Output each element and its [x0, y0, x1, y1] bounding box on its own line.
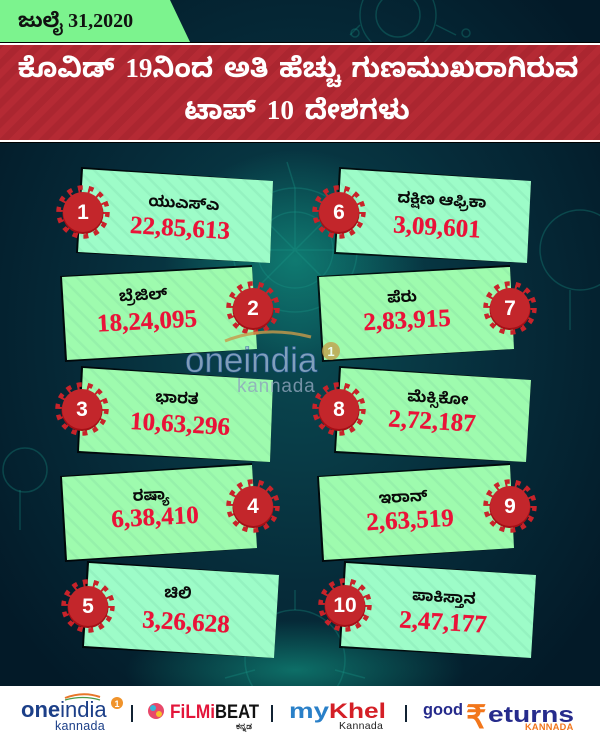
card 2: Brazil: 2: [247, 297, 259, 320]
card 1: USA: [58, 167, 273, 263]
card 2: Brazil: 18,24,095: [96, 305, 198, 338]
logo: goodreturns kannada: eturns: [488, 702, 574, 727]
watermark logo: 1: [327, 344, 335, 359]
watermark logo: oneindia: [185, 341, 318, 380]
card 3: India: ಭಾರತ: [155, 389, 199, 408]
card 10: Pakistan: ಪಾಕಿಸ್ತಾನ: [412, 587, 476, 610]
logo: goodreturns kannada: ₹: [466, 699, 486, 735]
logo: mykhel kannada: Kannada: [339, 720, 383, 732]
card 6: South Africa: 6: [333, 201, 345, 224]
logo: filmibeat kannada: [148, 702, 259, 733]
card 8: Mexico: 2,72,187: [387, 405, 476, 438]
card 8: Mexico: ಮೆಕ್ಸಿಕೋ: [407, 388, 469, 411]
watermark logo: kannada: [237, 376, 316, 397]
title text: ಟಾಪ್ 10 ದೇಶಗಳು: [184, 95, 410, 125]
card 8: Mexico: 8: [333, 398, 345, 421]
card 4: Russia: 4: [247, 495, 259, 518]
card 5: Chile: 3,26,628: [141, 606, 230, 639]
card 6: South Africa: 3,09,601: [392, 211, 481, 244]
card 5: Chile: 5: [82, 595, 94, 618]
card 6: South Africa: [314, 167, 531, 263]
logo: oneindia kannada: 1: [114, 699, 120, 709]
footer: [0, 686, 600, 739]
card 7: Peru: 2,83,915: [363, 305, 451, 336]
card 9: Iran: [317, 463, 534, 562]
card 3: India: 3: [76, 398, 88, 421]
card 7: Peru: 7: [504, 297, 516, 320]
card 10: Pakistan: [320, 561, 536, 658]
card 4: Russia: ರಷ್ಯಾ: [132, 486, 171, 508]
logo: filmibeat kannada: BEAT: [215, 702, 259, 723]
logo: filmibeat kannada: FiLMi: [170, 702, 215, 723]
logo: goodreturns kannada: good: [423, 700, 463, 719]
card 3: India: [58, 366, 273, 462]
logo: goodreturns kannada: [423, 699, 574, 735]
card 2: Brazil: [60, 265, 278, 362]
logo: oneindia kannada: [21, 694, 123, 733]
logo: mykhel kannada: Khel: [329, 700, 386, 723]
card 10: Pakistan: 10: [333, 594, 357, 617]
card 9: Iran: 2,63,519: [366, 505, 454, 536]
card 7: Peru: ಪೆರು: [387, 288, 418, 307]
card 1: USA: 22,85,613: [129, 212, 231, 245]
card 2: Brazil: ಬ್ರೆಜಿಲ್: [119, 286, 169, 306]
logo: oneindia kannada: kannada: [55, 719, 105, 733]
card 4: Russia: [60, 463, 278, 562]
card 1: USA: 1: [77, 201, 89, 224]
card 8: Mexico: [314, 366, 531, 462]
card 5: Chile: [64, 561, 279, 658]
title banner: [0, 42, 600, 143]
logo: mykhel kannada: [289, 700, 386, 732]
card 10: Pakistan: 2,47,177: [398, 606, 487, 639]
card 9: Iran: 9: [504, 495, 516, 518]
card 5: Chile: ಚಿಲಿ: [164, 584, 192, 603]
card 9: Iran: ಇರಾನ್: [378, 488, 428, 507]
card 1: USA: ಯುಎಸ್ಎ: [148, 193, 220, 214]
title text: ಕೊವಿಡ್ 19ನಿಂದ ಅತಿ ಹೆಚ್ಚು ಗುಣಮುಖರಾಗಿರುವ: [18, 53, 578, 88]
date text: ಜುಲೈ 31,2020: [18, 10, 133, 35]
logo: oneindia kannada: oneindia: [21, 697, 107, 722]
watermark logo: [185, 332, 340, 397]
logo: filmibeat kannada: ಕನ್ನಡ: [236, 722, 252, 733]
card 7: Peru: [317, 265, 534, 362]
date tab: [0, 0, 190, 42]
logo: goodreturns kannada: KANNADA: [525, 722, 574, 732]
logo: mykhel kannada: my: [289, 700, 329, 723]
title text: [18, 53, 578, 125]
card 6: South Africa: ದಕ್ಷಿಣ ಆಫ್ರಿಕಾ: [397, 189, 487, 214]
card 3: India: 10,63,296: [129, 408, 231, 441]
card 4: Russia: 6,38,410: [111, 502, 199, 533]
